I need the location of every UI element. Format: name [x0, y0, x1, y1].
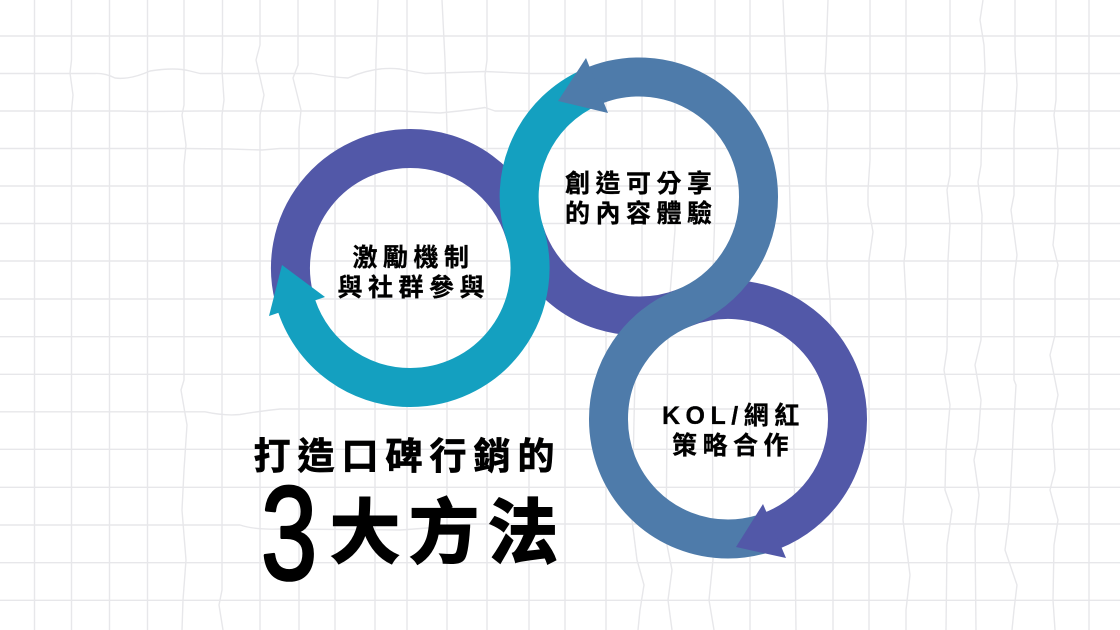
label: shareable content experience — [565, 170, 718, 228]
label: shareable content experience: 創造可分享 — [565, 170, 718, 198]
label: KOL and influencer partnership: KOL/網紅 — [662, 402, 805, 430]
purple ribbon: connects all three rings — [290, 148, 848, 534]
label: incentive mechanisms and community — [338, 244, 490, 302]
title line two: 大方法 — [330, 494, 567, 572]
label: KOL and influencer partnership — [662, 402, 805, 460]
label: KOL and influencer partnership: 策略合作 — [672, 432, 794, 460]
label: incentive mechanisms and community: 與社群參與 — [338, 274, 490, 302]
teal ribbon: top of upper ring to lower left ring — [294, 87, 590, 388]
label: incentive mechanisms and community: 激勵機制 — [352, 244, 475, 272]
arrow: steel blue head — [558, 58, 608, 113]
title numeral 3: 3 — [261, 460, 317, 608]
steel blue ribbon: lower right ring to upper ring — [590, 77, 763, 539]
title line one: 打造口碑行銷的 — [254, 436, 562, 477]
arrow: teal head — [269, 265, 325, 316]
label: shareable content experience: 的內容體驗 — [565, 199, 718, 228]
arrow: purple head — [736, 504, 786, 558]
